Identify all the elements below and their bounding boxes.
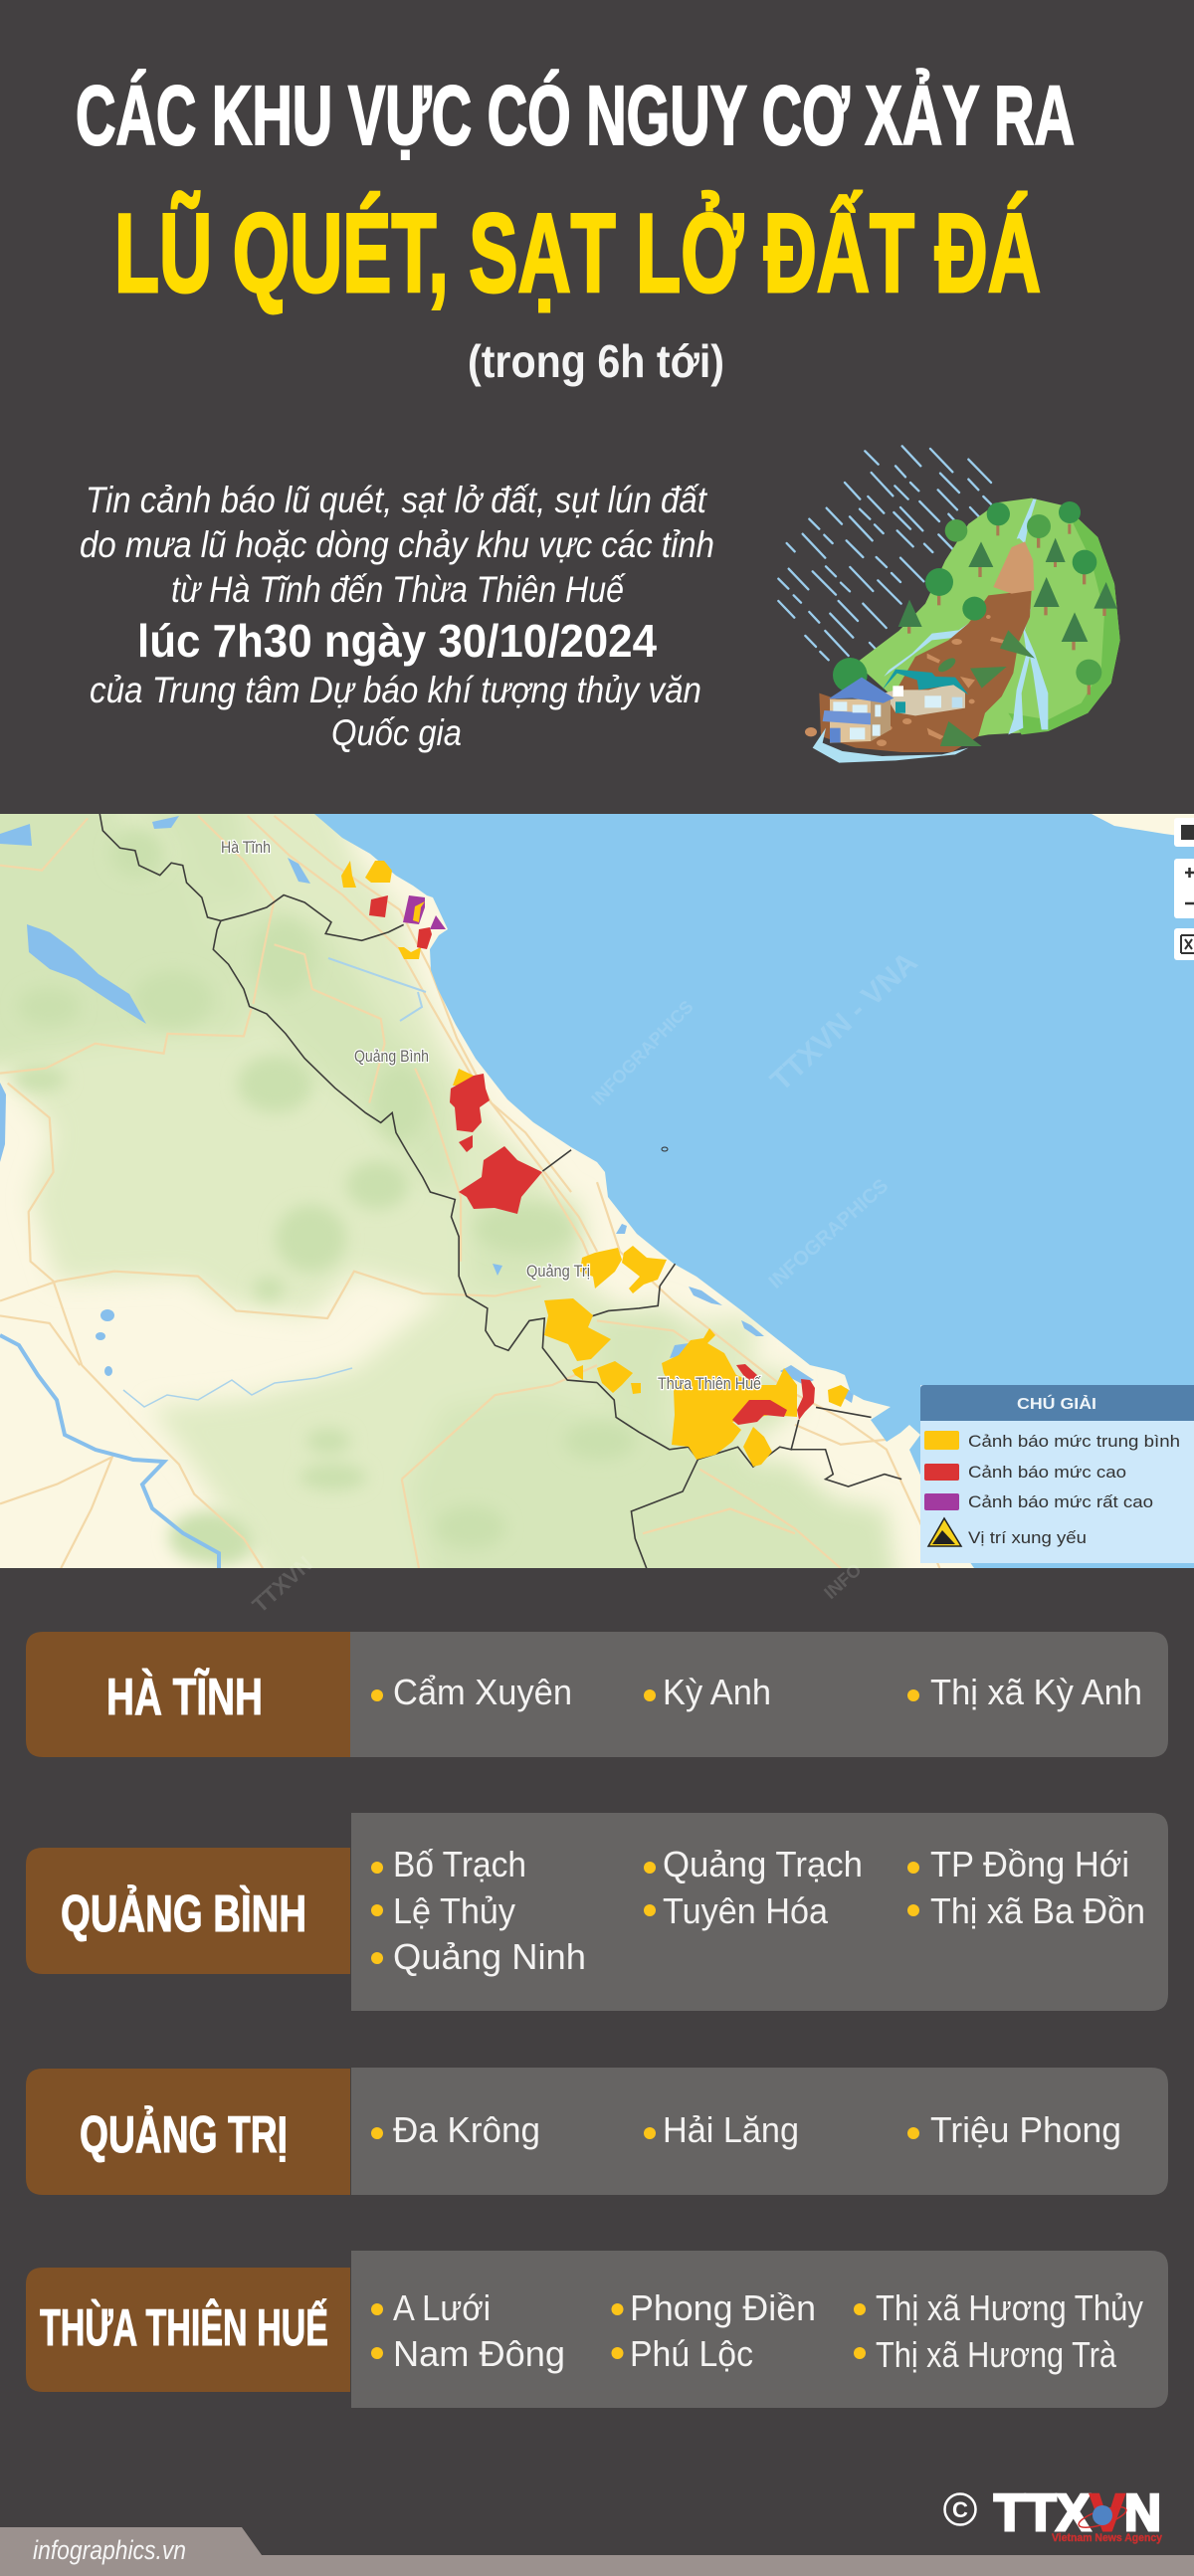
list: Hà Tĩnh districts: Kỳ Anh: [663, 1672, 771, 1712]
background watermarks: INFO: [820, 1559, 866, 1603]
intro text block: lúc 7h30 ngày 30/10/2024: [137, 615, 657, 667]
list: Hà Tĩnh districts: Thị xã Kỳ Anh: [930, 1672, 1142, 1712]
icon: landslide illustration: [778, 446, 1120, 763]
logo: TTXVN: TTXVN: [994, 2484, 1161, 2542]
map fullscreen control: [1174, 928, 1194, 960]
legend panel: [920, 1385, 1194, 1563]
list: Quảng Trị districts: Đa Krông: [393, 2109, 540, 2150]
background watermarks: TTXVN: [248, 1551, 317, 1618]
list: Thừa Thiên Huế districts: Thị xã Hương Trà: [876, 2334, 1117, 2375]
borders: [100, 814, 597, 1383]
intro text block: từ Hà Tĩnh đến Thừa Thiên Huế: [171, 569, 626, 610]
round trees: [907, 524, 1106, 694]
footer bar: [0, 2527, 1194, 2576]
water bodies: [0, 816, 854, 1403]
rain: [778, 446, 991, 660]
stream: [1008, 499, 1048, 734]
map province labels: Quảng Bình: [354, 1047, 429, 1066]
logo: TTXVN: C: [952, 2497, 968, 2522]
houses: [884, 684, 965, 715]
source url: infographics.vn: [33, 2535, 186, 2565]
map province labels: Thừa Thiên Huế: [658, 1374, 761, 1393]
map print control: [1174, 818, 1194, 847]
list: Hà Tĩnh districts: [371, 1672, 1142, 1712]
list: Quảng Bình districts: Bố Trạch: [393, 1844, 526, 1884]
list: Quảng Bình districts: Tuyên Hóa: [663, 1890, 829, 1931]
intro text block: [80, 480, 714, 753]
list: Quảng Bình districts: Quảng Trạch: [663, 1844, 863, 1884]
fallen pines: [936, 630, 1035, 746]
map zoom controls: [1174, 859, 1194, 918]
list: Thừa Thiên Huế districts: [371, 2287, 1143, 2375]
logo: TTXVN: Vietnam News Agency: [1052, 2532, 1163, 2544]
map: [0, 814, 1194, 1568]
rivers: [0, 1335, 219, 1568]
list: Quảng Trị districts: [371, 2109, 1121, 2150]
list: Quảng Trị districts: Hải Lăng: [663, 2109, 799, 2150]
legend panel: Cảnh báo mức rất cao: [968, 1492, 1153, 1511]
slide: [819, 590, 1032, 752]
panel: Hà Tĩnh: [26, 1632, 1168, 1757]
intro text block: Quốc gia: [331, 712, 462, 753]
hill: [856, 498, 1120, 743]
map watermarks: TTXVN - VNA: [764, 946, 924, 1097]
map watermarks: INFOGRAPHICS: [587, 997, 697, 1109]
map watermarks: INFOGRAPHICS: [765, 1175, 893, 1293]
list: Quảng Bình districts: [371, 1844, 1145, 1977]
background watermarks: [248, 1551, 866, 1618]
list: Quảng Bình districts: TP Đồng Hới: [930, 1844, 1129, 1884]
intro text block: của Trung tâm Dự báo khí tượng thủy văn: [90, 670, 701, 710]
list: Quảng Bình districts: Lệ Thủy: [393, 1890, 515, 1931]
panel: Quảng Trị: [26, 2068, 1168, 2195]
map province labels: Hà Tĩnh: [221, 838, 271, 857]
warning zones: very high: [403, 895, 446, 929]
panel: Quảng Bình: [26, 1813, 1168, 2011]
list: Quảng Trị districts: Triệu Phong: [930, 2109, 1121, 2150]
legend panel: CHÚ GIẢI: [1017, 1394, 1096, 1413]
list: Quảng Bình districts: Quảng Ninh: [393, 1936, 586, 1977]
list: Thừa Thiên Huế districts: A Lưới: [393, 2287, 491, 2328]
list: Thừa Thiên Huế districts: Nam Đông: [393, 2333, 565, 2374]
heading: Quảng Bình: QUẢNG BÌNH: [61, 1884, 306, 1943]
map watermarks: [587, 946, 924, 1293]
icon: vulnerable location triangle: [928, 1518, 961, 1546]
warning zones: medium: [341, 861, 849, 1467]
subtitle: (trong 6h tới): [468, 335, 724, 387]
list: Thừa Thiên Huế districts: Phú Lộc: [630, 2333, 753, 2374]
warning zones: high: [369, 895, 815, 1425]
sea: [314, 814, 1194, 1568]
legend panel: Cảnh báo mức cao: [968, 1463, 1126, 1482]
heading: Thừa Thiên Huế: THỪA THIÊN HUẾ: [40, 2298, 328, 2357]
roads: [0, 816, 597, 1568]
list: Hà Tĩnh districts: Cẩm Xuyên: [393, 1672, 572, 1712]
list: Thừa Thiên Huế districts: Phong Điền: [630, 2287, 816, 2328]
intro text block: do mưa lũ hoặc dòng chảy khu vực các tỉnh: [80, 524, 714, 565]
terrain wash: [0, 814, 904, 1568]
legend panel: Cảnh báo mức trung bình: [968, 1432, 1180, 1451]
map land base: [0, 814, 1194, 1568]
map province labels: Quảng Trị: [526, 1262, 590, 1281]
legend panel: Vị trí xung yếu: [968, 1528, 1087, 1547]
heading: Hà Tĩnh: HÀ TĨNH: [106, 1668, 263, 1726]
list: Thừa Thiên Huế districts: Thị xã Hương Thủy: [876, 2287, 1143, 2328]
list: Quảng Bình districts: Thị xã Ba Đồn: [930, 1890, 1145, 1931]
intro text block: Tin cảnh báo lũ quét, sạt lở đất, sụt lún đất: [86, 480, 708, 520]
pines: [898, 538, 1117, 642]
terrain darker patches: [13, 829, 635, 1566]
panel: Thừa Thiên Huế: [26, 2251, 1168, 2408]
heading: Quảng Trị: QUẢNG TRỊ: [80, 2105, 288, 2164]
map province labels: [221, 838, 761, 1393]
